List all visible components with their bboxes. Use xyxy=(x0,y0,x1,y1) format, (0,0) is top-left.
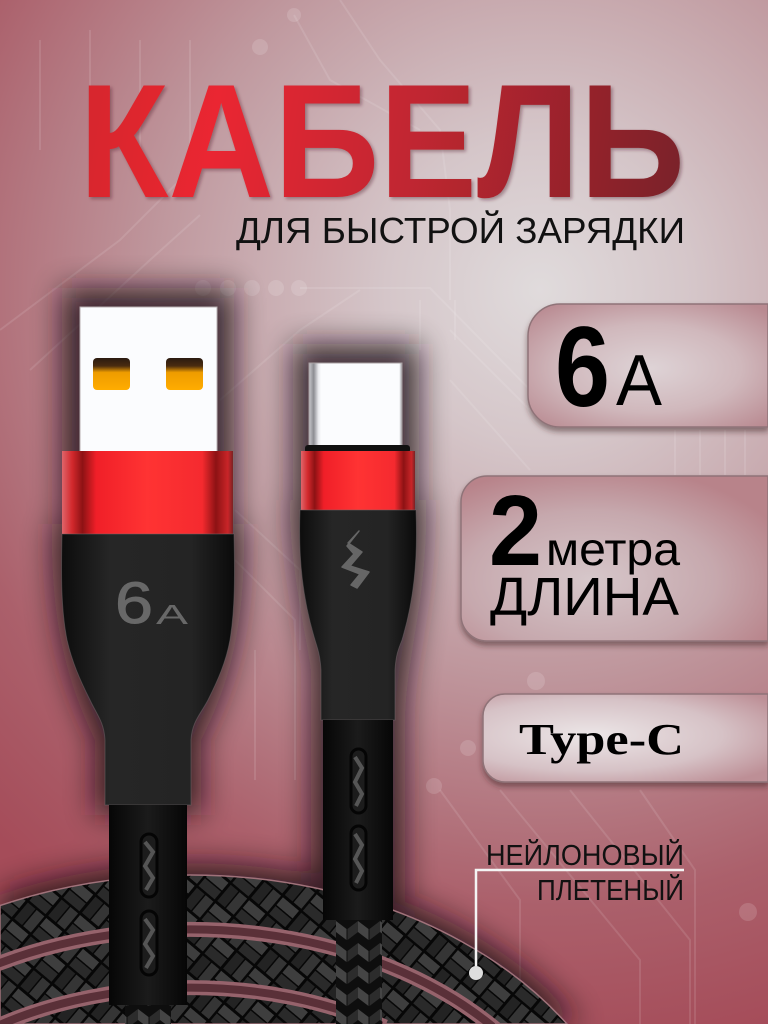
Type-C plug xyxy=(300,363,416,1024)
USB black body xyxy=(62,534,235,805)
value 6A: 6 xyxy=(555,304,610,431)
USB body label 6A: 6 xyxy=(115,571,153,636)
callout: nylon braid: НЕЙЛОНОВЫЙ xyxy=(486,838,684,872)
connector type label: Type-C xyxy=(519,715,684,764)
USB braid end xyxy=(125,1005,171,1024)
panel: Type-C xyxy=(483,694,768,782)
panel: 2 metres length xyxy=(461,475,768,641)
cable shadow halo xyxy=(0,288,580,1024)
panel: 6A current xyxy=(528,304,768,431)
USB red collar xyxy=(62,451,233,535)
USB sleeve slots xyxy=(141,834,157,975)
Type-C black body xyxy=(300,510,416,720)
value 6A: А xyxy=(616,341,662,421)
braided cable coil xyxy=(0,875,567,1024)
coil braid xyxy=(0,875,567,1024)
callout: nylon braid: ПЛЕТЕНЫЙ xyxy=(537,873,684,907)
value 2 metres: метра xyxy=(546,523,680,575)
Type-C cable sleeve xyxy=(323,720,393,920)
coil gap 1 xyxy=(0,929,490,1024)
Type-C black lip xyxy=(305,445,410,453)
value 2 metres: 2 xyxy=(489,475,542,587)
callout: nylon braid xyxy=(469,838,684,980)
subtitle: ДЛЯ БЫСТРОЙ ЗАРЯДКИ xyxy=(236,209,685,251)
USB contact slots xyxy=(93,358,203,390)
USB body label 6A: A xyxy=(156,599,189,630)
USB-A plug xyxy=(62,307,235,1024)
Type-C metal shell xyxy=(309,363,402,447)
USB cable sleeve xyxy=(109,805,187,1005)
Type-C red collar xyxy=(301,451,415,511)
Type-C braid xyxy=(336,920,382,1024)
Type-C sleeve slots xyxy=(351,749,366,890)
value 2 metres xyxy=(489,475,680,587)
value 6A xyxy=(555,304,662,431)
icon: lightning bolt xyxy=(342,531,369,588)
USB body label 6A xyxy=(115,571,189,636)
label length: ДЛИНА xyxy=(490,567,679,627)
title: КАБЕЛЬ xyxy=(79,51,685,232)
coil gap 2 xyxy=(2,988,378,1024)
USB metal shell xyxy=(80,307,217,452)
